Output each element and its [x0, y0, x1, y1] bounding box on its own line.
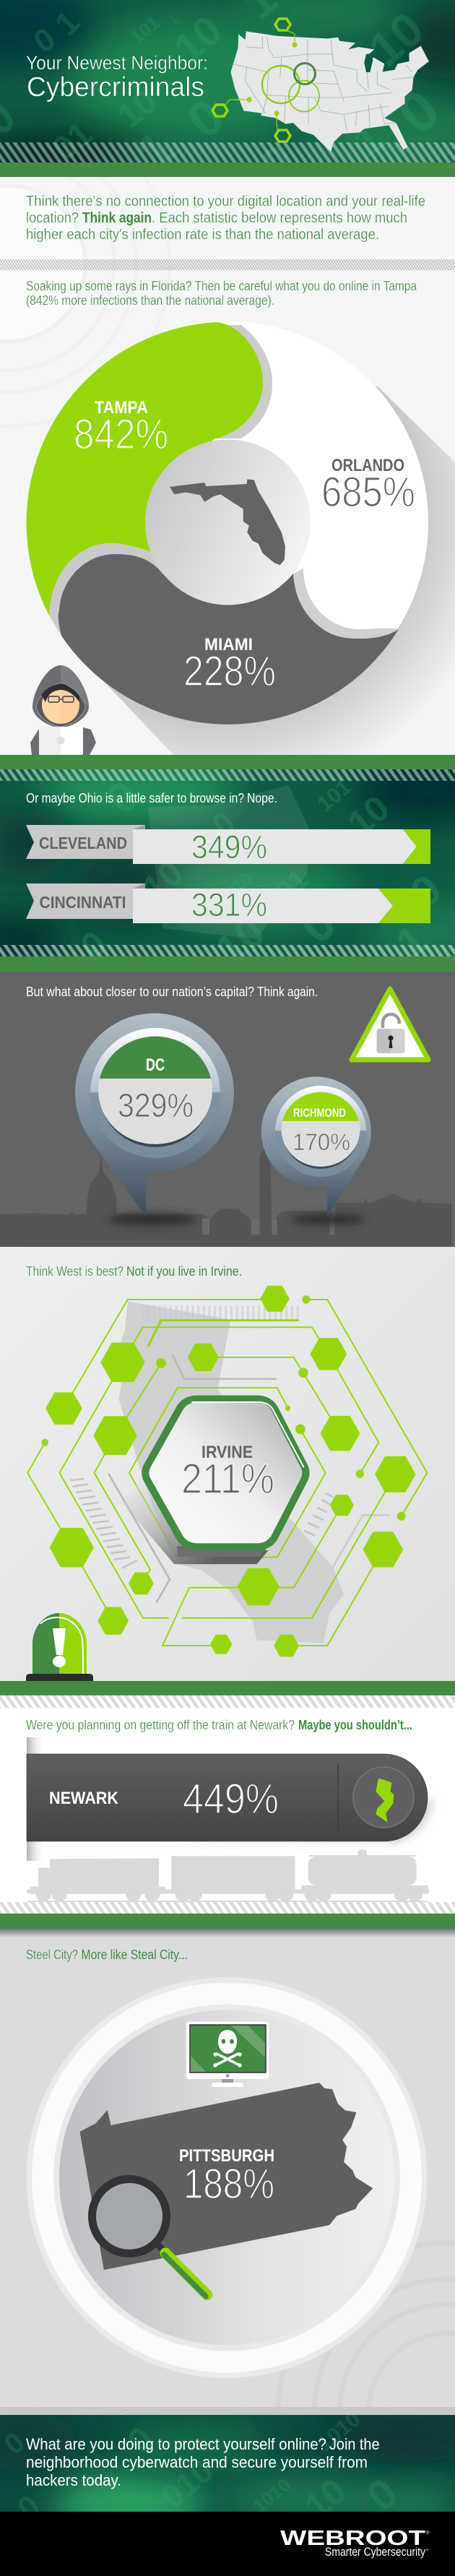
ohio background: 0 — [206, 805, 242, 844]
bar: cincinnati: CINCINNATI — [39, 893, 126, 912]
title: Your Newest Neighbor: — [26, 52, 208, 74]
ohio background: 0 — [73, 923, 114, 967]
newark lead text: Maybe you shouldn’t... — [298, 1718, 412, 1732]
segment: miami — [58, 554, 399, 725]
green divider band — [0, 956, 455, 972]
irvine lead text: Not if you live in Irvine. — [126, 1264, 242, 1279]
center hexagon — [145, 1399, 306, 1547]
pennsylvania disc — [26, 1977, 428, 2378]
pin: richmond: 170% — [292, 1129, 350, 1155]
ohio stripes — [0, 769, 455, 781]
panel: florida — [0, 177, 455, 755]
stat: miami: MIAMI — [204, 635, 253, 654]
newark stripes — [0, 1695, 455, 1708]
fine stripe divider — [0, 259, 455, 270]
ohio background: 101 — [313, 775, 356, 816]
header background: 10 — [110, 82, 165, 136]
stat: irvine: IRVINE — [202, 1443, 253, 1462]
icon: warning sign with open padlock — [352, 989, 428, 1060]
pin: dc: 329% — [118, 1086, 194, 1124]
green divider band — [0, 163, 455, 177]
bar: cleveland: CLEVELAND — [39, 834, 127, 852]
title — [26, 52, 208, 103]
cta background: 10 — [297, 2471, 354, 2527]
bar: cincinnati: 331% — [191, 886, 267, 923]
gray traces — [109, 1355, 389, 1602]
ohio background: 0 — [401, 865, 451, 917]
green divider band — [0, 755, 455, 769]
marker leaders — [224, 30, 297, 130]
intro text: location? — [26, 209, 79, 226]
ohio background — [0, 769, 455, 956]
stat: orlando: ORLANDO — [332, 456, 404, 475]
florida lead text: (842% more infections than the national average). — [26, 293, 274, 308]
header background: 0 — [177, 88, 234, 149]
capital lead text: Think again. — [257, 985, 318, 999]
train silhouette — [27, 1850, 430, 1902]
florida lead text — [26, 279, 417, 308]
center disc — [145, 439, 311, 605]
intro text: . Each statistic below represents how much — [152, 209, 407, 226]
cta text — [26, 2435, 380, 2489]
panel: newark — [0, 1695, 455, 1914]
donut chart — [27, 321, 428, 725]
ohio background: 10 — [340, 787, 397, 844]
stat: orlando: 685% — [321, 469, 415, 516]
infection rings — [262, 64, 319, 111]
panel: irvine — [0, 1247, 455, 1681]
pittsburgh lead text: More like Steal City... — [81, 1948, 188, 1962]
ohio background: 0 — [98, 771, 147, 824]
panel: header — [0, 0, 455, 163]
green divider band — [0, 1681, 455, 1695]
pin: dc: DC — [146, 1055, 165, 1075]
header background: 0 — [27, 21, 62, 60]
ohio background: 10 — [206, 907, 274, 975]
title: Cybercriminals — [27, 72, 204, 103]
hexagons — [46, 1287, 415, 1656]
icon: alarm beacon — [26, 1613, 93, 1681]
panel: capital — [0, 972, 455, 1247]
florida background — [0, 177, 455, 755]
stat: pittsburgh: PITTSBURGH — [179, 2146, 274, 2166]
cta text: Join the — [329, 2435, 380, 2453]
bar: cleveland — [26, 825, 430, 865]
fine stripe divider — [0, 2407, 455, 2415]
newark lead text: Were you planning on getting off the train at Newark? — [26, 1718, 295, 1732]
california silhouette — [119, 1302, 344, 1643]
stat: tampa: TAMPA — [95, 398, 148, 418]
stat: miami — [183, 635, 276, 695]
intro text: higher each city's infection rate is than the national average. — [26, 226, 379, 243]
header stripes — [0, 142, 455, 163]
icon: magnifying glass — [92, 2179, 207, 2296]
capital lead text: But what about closer to our nation’s capital? — [26, 985, 254, 999]
panel: call to action — [0, 2415, 455, 2512]
cta background: 0 — [358, 2468, 407, 2521]
bar: newark: NEWARK — [49, 1789, 119, 1808]
pittsburgh lead text: Steel City? — [26, 1948, 78, 1962]
cta text: What are you doing to protect yourself online? — [26, 2435, 326, 2453]
cta background: 0 — [120, 2419, 161, 2462]
ohio background: 01 — [269, 863, 314, 908]
ohio background: 1 — [386, 915, 436, 968]
skull and crossbones — [213, 2030, 242, 2067]
header background: 10 — [165, 7, 231, 72]
us map with infection rings — [230, 31, 429, 152]
ohio background: 010 — [222, 869, 256, 903]
cta background — [0, 2415, 455, 2512]
webroot logo: ® — [426, 2530, 430, 2536]
icon: florida — [170, 480, 285, 565]
circuit diagram — [27, 1287, 427, 1656]
trace dots — [41, 1295, 406, 1521]
segment: tampa — [27, 322, 263, 615]
pittsburgh lead text — [26, 1948, 188, 1962]
icon: infected monitor — [186, 2021, 269, 2087]
webroot logo: WEBROOT — [280, 2527, 425, 2550]
header background: 1 — [166, 12, 181, 27]
header background: 0 — [386, 77, 451, 147]
cta background: 1010 — [313, 2407, 365, 2456]
bar: cleveland: 349% — [191, 829, 267, 865]
webroot logo: ™ — [425, 2549, 429, 2553]
ohio lead text: Or maybe Ohio is a little safer to browse in? — [26, 791, 244, 805]
bar: newark: 449% — [183, 1776, 279, 1823]
state: pennsylvania — [79, 2083, 373, 2270]
pittsburgh background — [0, 1929, 455, 2407]
ohio background: 10 — [134, 852, 191, 909]
stat: irvine: 211% — [181, 1456, 274, 1503]
irvine lead text — [26, 1264, 242, 1279]
center hexagon shadow — [122, 1477, 269, 1564]
header background: 1 — [47, 3, 87, 43]
panel: footer — [0, 2512, 455, 2576]
green divider band — [0, 1914, 455, 1929]
fold shadows — [27, 1737, 46, 1754]
donut long shadow — [99, 386, 455, 755]
cta text: hackers today. — [26, 2471, 121, 2489]
intro text — [26, 193, 425, 243]
panel: pittsburgh — [0, 1929, 455, 2407]
stat: miami: 228% — [183, 648, 276, 695]
stat: pittsburgh: 188% — [183, 2161, 274, 2208]
bar: newark — [27, 1754, 428, 1841]
ohio background: 0 — [289, 894, 346, 954]
panel: ohio — [0, 769, 455, 956]
header background: 0 — [253, 135, 303, 188]
cta background: 0 — [11, 2488, 47, 2527]
webroot logo — [280, 2527, 430, 2559]
header background: 1 — [343, 113, 393, 166]
intro text: Think again — [82, 209, 152, 226]
hexagon markers — [212, 19, 290, 142]
cta background: 010 — [154, 2451, 220, 2516]
cta text: neighborhood cyberwatch and secure yourself from — [26, 2453, 368, 2471]
header background: 01 — [46, 115, 100, 168]
ohio lead text: Nope. — [247, 791, 277, 805]
cta background: 1010 — [249, 2473, 295, 2517]
header background: 101 — [126, 12, 164, 48]
header background: 10 — [358, 1, 433, 77]
header background: 1 — [126, 121, 183, 181]
pin: richmond — [261, 1077, 371, 1216]
icon: new jersey — [376, 1778, 394, 1823]
irvine lead text: Think West is best? — [26, 1264, 124, 1279]
icon: hooded hacker — [30, 665, 96, 755]
header background — [0, 0, 455, 163]
stat: tampa: 842% — [74, 411, 168, 458]
bar: cincinnati — [26, 883, 430, 923]
pin: richmond: RICHMOND — [293, 1106, 346, 1120]
skyline — [0, 1147, 452, 1247]
webroot logo: Smarter Cybersecurity — [325, 2546, 426, 2559]
pin shadows — [108, 1214, 365, 1225]
pin: dc — [75, 1013, 234, 1216]
stat: pittsburgh — [179, 2146, 274, 2208]
lime traces — [27, 1300, 427, 1646]
